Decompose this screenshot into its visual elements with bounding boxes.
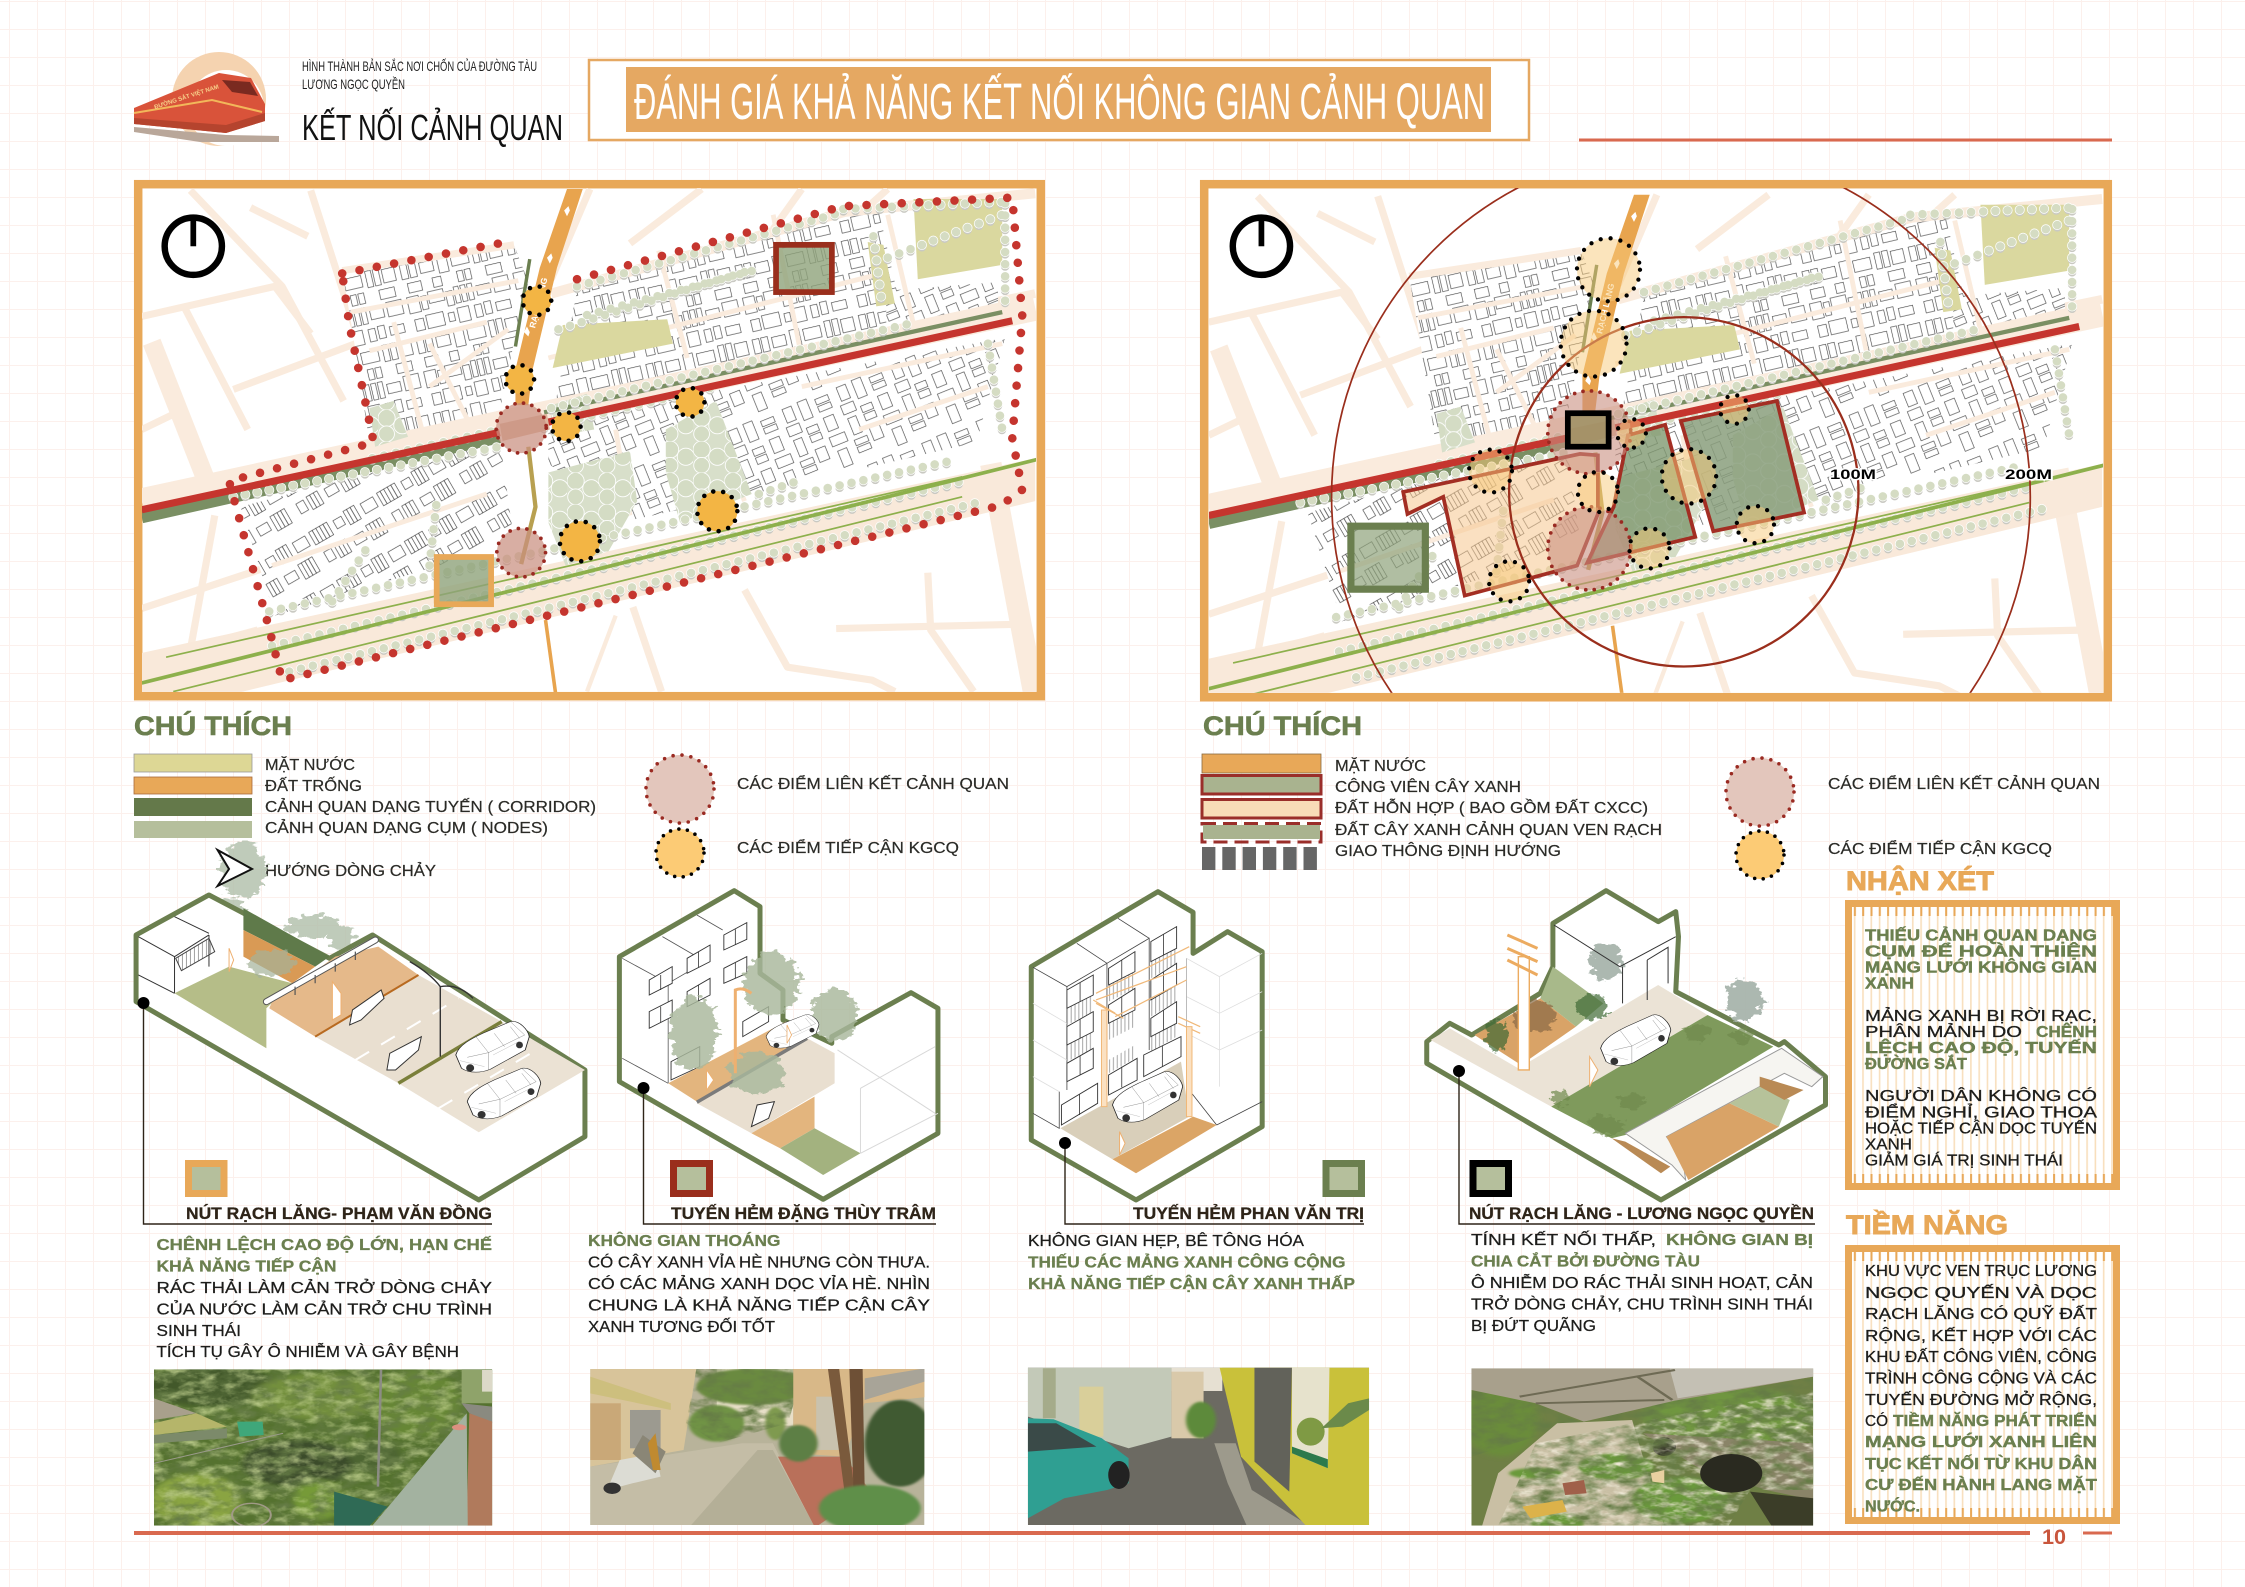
text block 3: KHÔNG GIAN HẸP, BÊ TÔNG HÓA	[1028, 1231, 1304, 1250]
header rule	[1579, 138, 2112, 142]
panel text: NƯỚC.	[1865, 1496, 1920, 1516]
legend labels: HƯỚNG DÒNG CHẢY	[265, 863, 436, 880]
panel text: KHU ĐẤT CÔNG VIÊN, CÔNG	[1865, 1347, 2097, 1366]
text block 4: CHIA CẮT BỞI ĐƯỜNG TÀU	[1471, 1252, 1700, 1270]
text block 2: CHUNG LÀ KHẢ NĂNG TIẾP CẬN CÂY	[588, 1296, 930, 1314]
striped frame	[1845, 900, 2120, 1190]
photo 3: Phan Văn Trị alley	[1028, 1368, 1369, 1525]
legend labels: ĐẤT HỖN HỢP ( BAO GỒM ĐẤT CXCC)	[1335, 799, 1648, 817]
legend labels: GIAO THÔNG ĐỊNH HƯỚNG	[1335, 843, 1561, 860]
panel text: XANH	[1865, 1136, 1912, 1154]
north icon	[1233, 218, 1290, 275]
access point symbol	[1736, 831, 1784, 879]
photo 2: Đặng Thùy Trâm street	[590, 1368, 936, 1532]
legend swatches	[134, 754, 252, 838]
photo 1: canal vegetation	[145, 1367, 492, 1527]
diagram: Đặng Thùy Trâm lane	[619, 891, 938, 1199]
text block 4: KHÔNG GIAN BỊ	[1666, 1230, 1813, 1249]
title banner	[589, 60, 1529, 140]
legend labels	[265, 757, 596, 880]
isometric diagrams 1 and 2	[136, 842, 938, 1200]
caption 1: NÚT RẠCH LĂNG- PHẠM VĂN ĐỒNG	[186, 1204, 492, 1223]
panel text: TRÌNH CÔNG CỘNG VÀ CÁC	[1865, 1368, 2097, 1388]
legend labels: MẶT NƯỚC	[1335, 758, 1426, 775]
point labels	[1828, 775, 2100, 858]
panel text: NGƯỜI DÂN KHÔNG CÓ	[1865, 1086, 2097, 1105]
text block 4: TÍNH KẾT NỐI THẤP,	[1471, 1229, 1656, 1249]
access points	[505, 286, 737, 561]
panel text: ĐIỂM NGHỈ, GIAO THOA	[1865, 1102, 2097, 1122]
caption 4: NÚT RẠCH LĂNG - LƯƠNG NGỌC QUYỀN	[1469, 1204, 1814, 1223]
header logo: train: ĐƯỜNG SẮT VIỆT NAM	[153, 82, 220, 111]
panel text: XANH	[1865, 976, 1914, 992]
point labels: CÁC ĐIỂM TIẾP CẬN KGCQ	[1828, 840, 2052, 858]
text block 1: KHẢ NĂNG TIẾP CẬN	[156, 1256, 336, 1276]
isometric diagrams 3 and 4	[1031, 891, 1825, 1200]
caption 3: TUYẾN HẺM PHAN VĂN TRỊ	[1133, 1204, 1364, 1223]
text block 4: TRỞ DÒNG CHẢY, CHU TRÌNH SINH THÁI	[1471, 1294, 1813, 1314]
link point: north	[496, 403, 546, 453]
panel text: RỘNG, KẾT HỢP VỚI CÁC	[1865, 1326, 2097, 1345]
legend labels	[1335, 758, 1662, 860]
header project text	[302, 57, 563, 148]
panel text: TIỀM NĂNG PHÁT TRIỂN	[1893, 1411, 2097, 1430]
zone: mixed land	[1403, 454, 1598, 596]
panel text: NGỌC QUYẾN VÀ DỌC	[1865, 1283, 2097, 1302]
map 2: zones and radii	[1200, 180, 2112, 702]
text block 3: KHẢ NĂNG TIẾP CẬN CÂY XANH THẤP	[1028, 1274, 1355, 1293]
panel text: CÓ	[1865, 1411, 1888, 1430]
map 1: landscape connection points	[138, 184, 1041, 716]
panel text: PHÂN MẢNH DO	[1865, 1022, 2022, 1041]
text block 4: Ô NHIỄM DO RÁC THẢI SINH HOẠT, CẢN	[1471, 1273, 1813, 1292]
caption 1	[138, 997, 492, 1224]
panel text: ĐƯỜNG SẮT	[1865, 1054, 1967, 1073]
legend 2	[1202, 710, 2100, 879]
panel text: MẠNG LƯỚI XANH LIÊN	[1865, 1432, 2097, 1451]
caption 3	[1059, 1137, 1364, 1224]
text block 2	[588, 1231, 930, 1336]
legend labels: CẢNH QUAN DẠNG TUYẾN ( CORRIDOR)	[265, 799, 596, 816]
legend labels: ĐẤT TRỐNG	[265, 777, 362, 795]
panel text: RẠCH LĂNG CÓ QUỸ ĐẤT	[1865, 1303, 2097, 1323]
radius labels: 200M	[2005, 466, 2052, 482]
caption 2: TUYẾN HẺM ĐẶNG THÙY TRÂM	[671, 1204, 936, 1223]
heading: NHẬN XÉT	[1846, 865, 1995, 896]
site marker: Đặng Thùy Trâm	[776, 245, 832, 292]
legend heading: CHÚ THÍCH	[134, 710, 292, 741]
panel text: LỆCH CAO ĐỘ, TUYẾN	[1865, 1038, 2097, 1057]
panel text: KHU VỰC VEN TRỤC LƯƠNG	[1865, 1263, 2097, 1280]
header logo: train	[134, 52, 279, 146]
site marker: Lương Ngọc Quyền	[1568, 413, 1609, 447]
text block 1: RÁC THẢI LÀM CẢN TRỞ DÒNG CHẢY	[156, 1278, 492, 1297]
legend labels: CÔNG VIÊN CÂY XANH	[1335, 779, 1521, 796]
panel text: MẠNG LƯỚI KHÔNG GIAN	[1865, 958, 2097, 976]
panel text: TUYẾN ĐƯỜNG MỞ RỘNG,	[1865, 1390, 2097, 1409]
radius labels: 100M	[1830, 466, 1876, 482]
text block 1	[156, 1235, 492, 1361]
heading: TIỀM NĂNG	[1846, 1209, 2008, 1240]
panel text	[1865, 926, 2097, 1170]
radius labels	[1830, 466, 2052, 482]
text block 2: CÓ CÁC MẢNG XANH DỌC VỈA HÈ. NHÌN	[588, 1274, 930, 1293]
panel text: CHÊNH	[2036, 1022, 2097, 1041]
text block 2: XANH TƯƠNG ĐỐI TỐT	[588, 1316, 775, 1336]
text block 2: KHÔNG GIAN THOÁNG	[588, 1231, 780, 1250]
link point symbol	[1726, 758, 1794, 826]
legend swatches	[1202, 754, 1321, 870]
caption 4	[1453, 1065, 1815, 1224]
panel text: MẢNG XANH BỊ RỜI RẠC,	[1865, 1006, 2097, 1025]
text block 1: CHÊNH LỆCH CAO ĐỘ LỚN, HẠN CHẾ	[156, 1235, 492, 1254]
diagram: Lương Ngọc Quyền node	[1427, 891, 1825, 1200]
leader lines and site captions	[138, 997, 1815, 1224]
access point symbol	[656, 829, 704, 877]
link point: south	[497, 528, 546, 577]
footer rule and page number	[134, 1526, 2112, 1549]
panel text: GIẢM GIÁ TRỊ SINH THÁI	[1865, 1150, 2063, 1170]
diagram: Phạm Văn Đồng node	[136, 842, 585, 1200]
point labels	[737, 775, 1009, 857]
north icon	[165, 218, 222, 275]
header project text: HÌNH THÀNH BẢN SẮC NƠI CHỐN CỦA ĐƯỜNG TÀU	[302, 57, 537, 74]
striped frame	[1845, 1245, 2120, 1524]
study boundary	[229, 198, 1022, 680]
header project text: LƯƠNG NGỌC QUYỀN	[302, 76, 405, 92]
point labels: CÁC ĐIỂM LIÊN KẾT CẢNH QUAN	[737, 775, 1009, 793]
panel text	[1865, 1263, 2097, 1516]
link point symbol	[646, 755, 714, 823]
flow arrow icon	[218, 850, 252, 886]
legend heading: CHÚ THÍCH	[1203, 710, 1362, 741]
zone: green park east	[1681, 401, 1804, 531]
text block 1: SINH THÁI	[156, 1321, 241, 1340]
text block 4: BỊ ĐỨT QUÃNG	[1471, 1315, 1596, 1335]
panel text: TỤC KẾT NỐI TỪ KHU DÂN	[1865, 1453, 2097, 1473]
link points	[1548, 391, 1631, 590]
text block 1: TÍCH TỤ GÂY Ô NHIỄM VÀ GÂY BỆNH	[156, 1342, 459, 1361]
tiềm năng panel	[1845, 1209, 2120, 1524]
footer rule and page number: 10	[2042, 1526, 2066, 1549]
legend 1	[134, 710, 1009, 880]
panel text: CƯ ĐẾN HÀNH LANG MẶT	[1865, 1475, 2097, 1494]
panel text: THIẾU CẢNH QUAN DẠNG	[1865, 926, 2097, 944]
text block 3	[1028, 1231, 1355, 1293]
text block 1: CỦA NƯỚC LÀM CẢN TRỞ CHU TRÌNH	[156, 1300, 492, 1318]
panel text: CỤM ĐỂ HOÀN THIỆN	[1865, 942, 2097, 960]
photo 4: polluted canal	[1463, 1368, 1820, 1533]
point labels: CÁC ĐIỂM TIẾP CẬN KGCQ	[737, 839, 959, 857]
text block 2: CÓ CÂY XANH VỈA HÈ NHƯNG CÒN THƯA.	[588, 1252, 930, 1272]
legend labels: ĐẤT CÂY XANH CẢNH QUAN VEN RẠCH	[1335, 822, 1662, 839]
nhận xét panel	[1845, 865, 2120, 1190]
site marker: Phạm Văn Đồng	[437, 557, 491, 604]
text block 3: THIẾU CÁC MẢNG XANH CÔNG CỘNG	[1028, 1252, 1346, 1272]
title banner: ĐÁNH GIÁ KHẢ NĂNG KẾT NỐI KHÔNG GIAN CẢNH QUAN	[634, 72, 1485, 130]
radius circles	[1330, 188, 2032, 693]
point labels: CÁC ĐIỂM LIÊN KẾT CẢNH QUAN	[1828, 775, 2100, 793]
access points	[1469, 238, 1774, 601]
panel text: HOẶC TIẾP CẬN DỌC TUYẾN	[1865, 1118, 2097, 1138]
diagram: Phan Văn Trị lane	[1031, 892, 1262, 1200]
header project text: KẾT NỐI CẢNH QUAN	[302, 106, 563, 148]
site marker: Phan Văn Trị	[1351, 526, 1425, 589]
zone: green park west	[1587, 425, 1695, 563]
legend labels: CẢNH QUAN DẠNG CỤM ( NODES)	[265, 820, 548, 837]
caption 2	[638, 1082, 936, 1224]
text block 4	[1471, 1229, 1813, 1335]
legend labels: MẶT NƯỚC	[265, 757, 355, 774]
